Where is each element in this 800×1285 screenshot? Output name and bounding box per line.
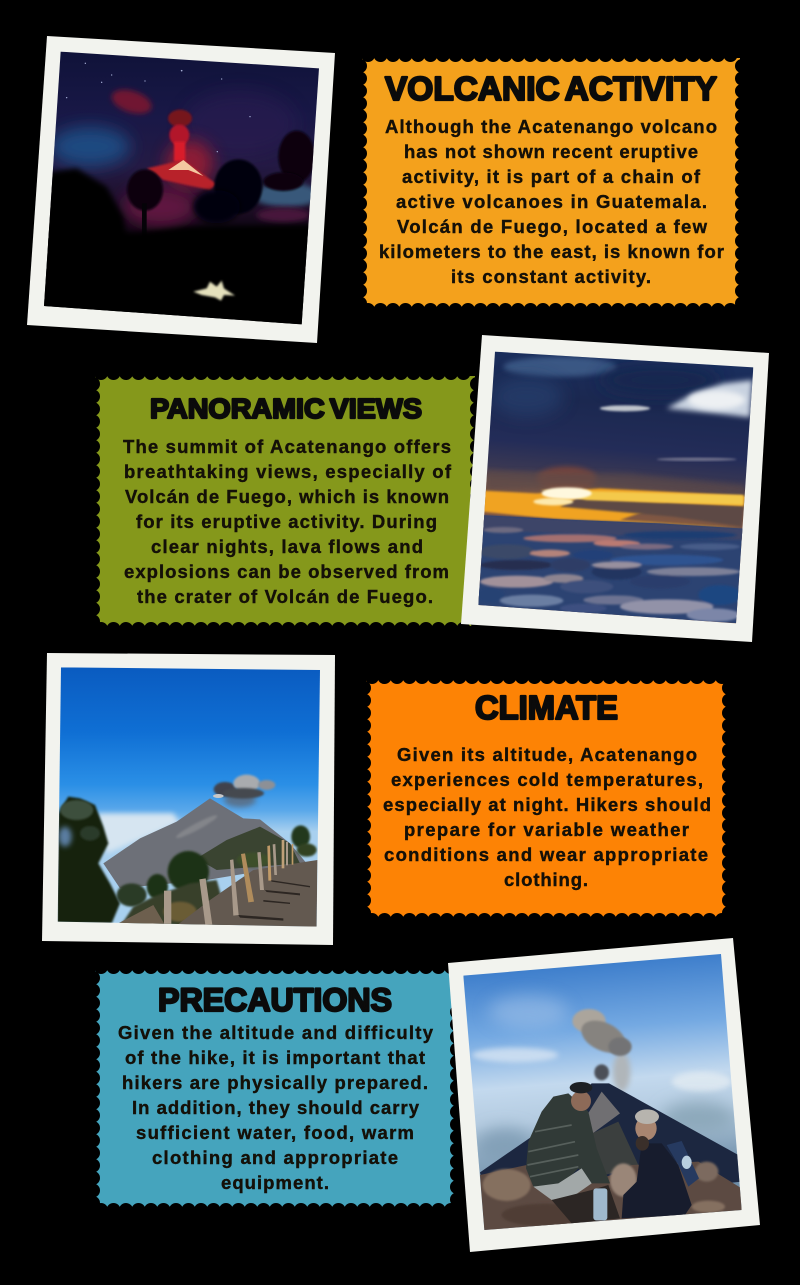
- body text: explosions can be observed from: [124, 561, 449, 582]
- body text: clear nights, lava flows and: [151, 536, 423, 557]
- body text: clothing.: [504, 869, 588, 890]
- body text: In addition, they should carry: [132, 1097, 420, 1118]
- body text: The summit of Acatenango offers: [123, 436, 451, 457]
- body text: clothing and appropriate: [152, 1147, 398, 1168]
- body text: the crater of Volcán de Fuego.: [137, 586, 433, 607]
- body text: prepare for variable weather: [404, 819, 689, 840]
- body text: kilometers to the east, is known for: [379, 241, 724, 262]
- panel: panoramic views: [93, 335, 769, 642]
- text box: panoramic views: [93, 373, 477, 629]
- photo: sunset sea of clouds: [473, 347, 760, 630]
- heading: VOLCANIC ACTIVITY: [385, 70, 717, 107]
- body text: hikers are physically prepared.: [122, 1072, 428, 1093]
- photo frame: volcano with blue sky: [42, 653, 335, 945]
- panel: volcanic activity: [27, 36, 742, 343]
- body text: activity, it is part of a chain of: [402, 166, 701, 187]
- body text: [118, 1022, 434, 1193]
- panel: precautions: [93, 938, 760, 1252]
- body text: equipment.: [221, 1172, 329, 1193]
- body text: [383, 744, 711, 890]
- photo frame: hikers at the summit: [448, 938, 760, 1252]
- photo: night eruption: [40, 47, 323, 330]
- body text: Given the altitude and difficulty: [118, 1022, 434, 1043]
- body text: conditions and wear appropriate: [384, 844, 708, 865]
- heading: PANORAMIC VIEWS: [150, 393, 422, 424]
- heading: CLIMATE: [475, 689, 618, 726]
- photo: two hikers facing volcano: [462, 952, 745, 1232]
- body text: [379, 116, 724, 287]
- heading: PRECAUTIONS: [158, 982, 392, 1018]
- body text: Although the Acatenango volcano: [385, 116, 717, 137]
- text box: volcanic activity: [360, 55, 742, 310]
- photo frame: erupting volcano at night: [27, 36, 335, 343]
- photo: daytime ash plume: [57, 667, 322, 928]
- body text: for its eruptive activity. During: [136, 511, 437, 532]
- text box: precautions: [93, 967, 457, 1210]
- body text: has not shown recent eruptive: [404, 141, 698, 162]
- body text: sufficient water, food, warm: [136, 1122, 414, 1143]
- body text: breathtaking views, especially of: [124, 461, 452, 482]
- body text: Volcán de Fuego, which is known: [125, 486, 449, 507]
- panel: climate: [42, 653, 729, 945]
- body text: its constant activity.: [451, 266, 651, 287]
- body text: of the hike, it is important that: [125, 1047, 425, 1068]
- body text: [123, 436, 452, 607]
- body text: Volcán de Fuego, located a few: [397, 216, 708, 237]
- body text: active volcanoes in Guatemala.: [396, 191, 707, 212]
- text box: climate: [364, 677, 729, 920]
- body text: especially at night. Hikers should: [383, 794, 711, 815]
- body text: experiences cold temperatures,: [391, 769, 703, 790]
- photo frame: sunset above clouds: [461, 335, 769, 642]
- body text: Given its altitude, Acatenango: [397, 744, 697, 765]
